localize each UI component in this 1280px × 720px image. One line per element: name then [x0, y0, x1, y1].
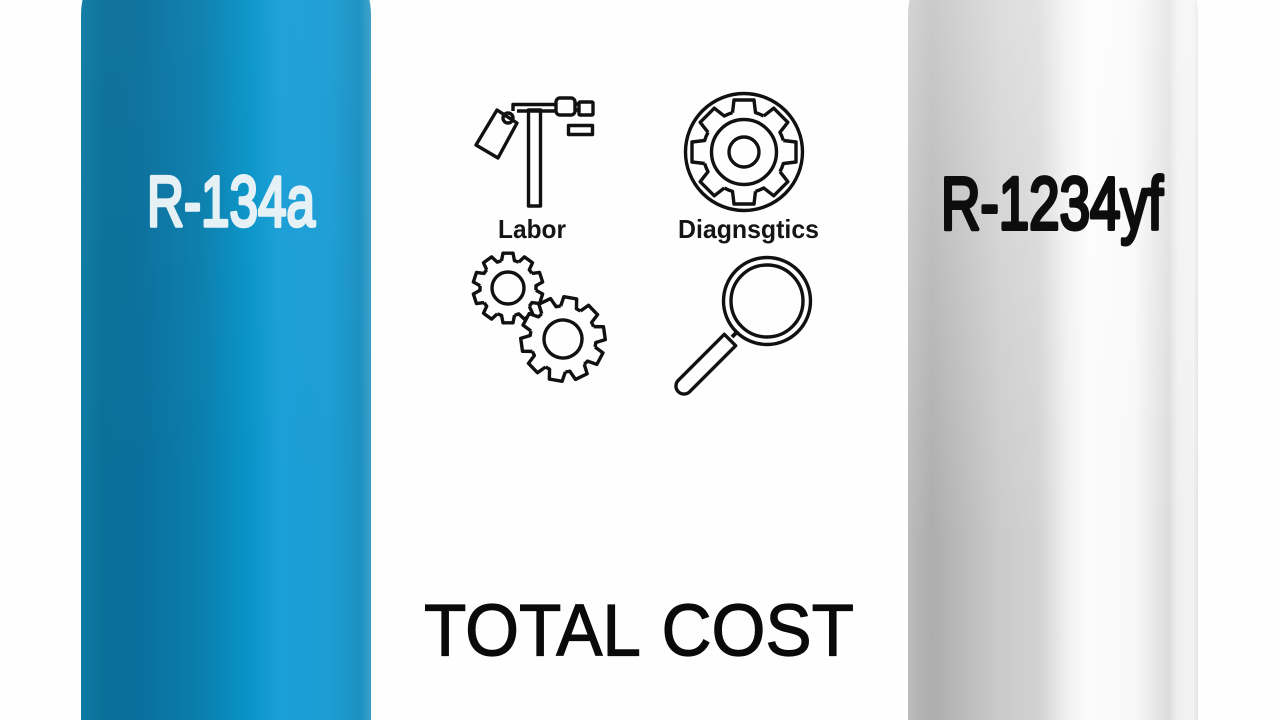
Diagnostics label: Diagnsgtics: [678, 214, 819, 244]
R-134a label: R-134a: [147, 163, 315, 242]
Labor label: Labor: [498, 214, 566, 244]
TOTAL COST heading: TOTAL COST: [424, 590, 854, 672]
R-1234yf label: R-1234yf: [941, 162, 1163, 245]
icon: two meshing gears: [472, 253, 613, 388]
large gear: [513, 290, 613, 388]
icon: diagnostics gear in circle: [686, 94, 802, 210]
R-134a blue cylinder: [81, 0, 371, 720]
R-1234yf silver cylinder: [908, 0, 1198, 720]
small gear: [472, 253, 544, 323]
icon: labor manifold tool: [476, 98, 593, 206]
icon: magnifying glass: [676, 258, 810, 394]
